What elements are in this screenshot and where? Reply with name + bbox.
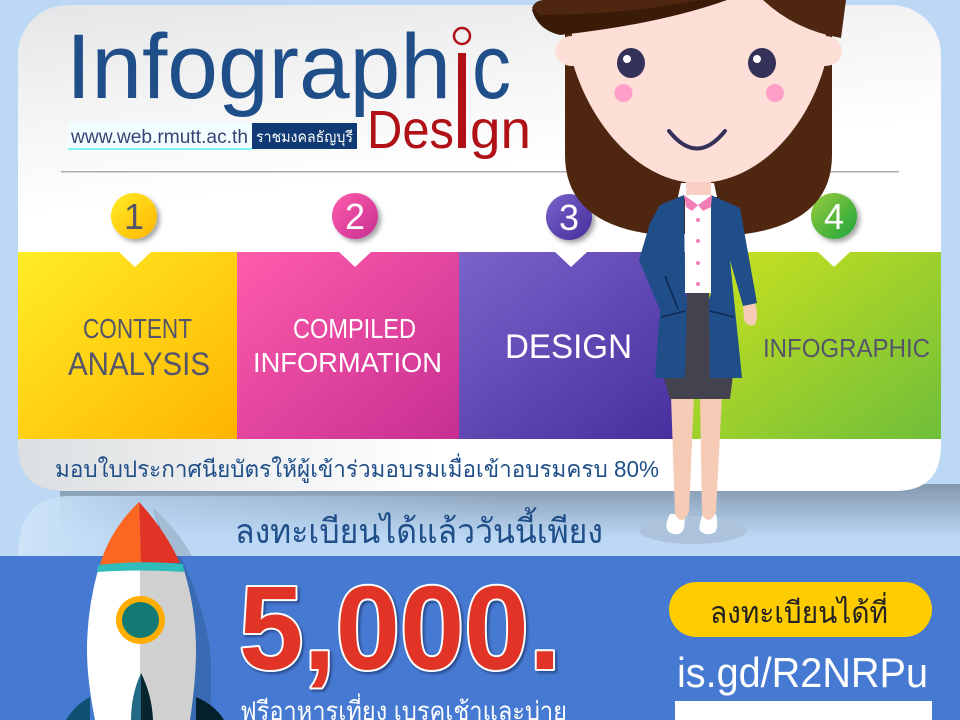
- rocket window: [116, 596, 165, 644]
- blue footer band: [0, 556, 960, 720]
- website tag: www.web.rmutt.ac.th: [70, 127, 248, 148]
- fringe right: [763, 0, 846, 38]
- skirt: [663, 290, 733, 399]
- step number 4: 4: [824, 196, 844, 237]
- label: design: DESIGN: [505, 328, 632, 366]
- website tag: [68, 123, 357, 150]
- card shadow band: [60, 484, 960, 556]
- bow collar: [684, 195, 712, 211]
- label: compiled information: COMPILED: [293, 313, 416, 344]
- ears: [555, 36, 842, 66]
- neck and collar: [678, 182, 717, 198]
- main card: [18, 5, 941, 491]
- hair back: [565, 30, 832, 234]
- band 4 green: [690, 252, 941, 439]
- fringe left: [532, 0, 727, 35]
- blazer pockets: [661, 276, 734, 317]
- rocket center fin: [131, 673, 141, 720]
- rocket body: [87, 570, 140, 720]
- title word: Infographic: c: [472, 16, 511, 118]
- smile: [669, 131, 725, 148]
- rocket illustration: [66, 502, 224, 720]
- registration url: is.gd/R2NRPu: [677, 649, 928, 696]
- step number 3: 3: [559, 197, 579, 238]
- website tag: ราชมงคลธัญบุรี: [256, 129, 353, 147]
- certificate note: มอบใบประกาศนียบัตรให้ผู้เข้าร่วมอบรมเมื่อเข้าอบรมครบ 80%: [55, 453, 659, 483]
- band 1 yellow: [18, 252, 237, 439]
- note strip: [18, 439, 941, 491]
- step number 2: 2: [345, 196, 365, 237]
- price: 5,000.: [239, 562, 561, 695]
- rocket band: [97, 562, 184, 572]
- face: [572, 0, 826, 183]
- blazer: [639, 195, 757, 378]
- step number 3: [546, 194, 592, 240]
- red letter i: [454, 28, 470, 148]
- label: compiled information: INFORMATION: [253, 347, 442, 378]
- label: content analysis: ANALYSIS: [68, 346, 210, 382]
- character illustration: [532, 0, 846, 544]
- step number 1: 1: [124, 196, 144, 237]
- shoes: [666, 514, 717, 534]
- ground shadow: [639, 516, 747, 544]
- band 2 pink: [237, 252, 459, 439]
- step bands: [18, 252, 941, 439]
- label: infographic: INFOGRAPHIC: [763, 333, 930, 363]
- title: [66, 16, 531, 160]
- rocket fins: [66, 697, 90, 720]
- step number 1: [111, 193, 157, 239]
- legs: [671, 395, 722, 520]
- title word: Infographic: Infograph: [66, 16, 451, 118]
- title word: Design: Des: [367, 100, 454, 160]
- band 3 purple: [459, 252, 690, 439]
- registration pill: ลงทะเบียนได้ที่: [710, 592, 888, 630]
- step number 2: [332, 193, 378, 239]
- shirt: [685, 195, 712, 293]
- registration heading: ลงทะเบียนได้แล้ววันนี้เพียง: [235, 507, 603, 551]
- label: compiled information: [253, 313, 442, 378]
- eyes: [617, 48, 776, 78]
- shirt buttons: [696, 218, 700, 286]
- label: content analysis: [68, 313, 210, 382]
- label: content analysis: CONTENT: [83, 313, 192, 344]
- title word: Design: [367, 100, 531, 160]
- rocket nose: [100, 502, 141, 565]
- card reflection: [18, 496, 500, 556]
- step number 4: [811, 193, 857, 239]
- white box: [675, 701, 932, 720]
- rocket shadow: [153, 508, 211, 720]
- title word: Design: gn: [470, 100, 531, 160]
- registration pill: [669, 582, 932, 637]
- hand: [743, 303, 757, 325]
- cheeks: [614, 84, 784, 102]
